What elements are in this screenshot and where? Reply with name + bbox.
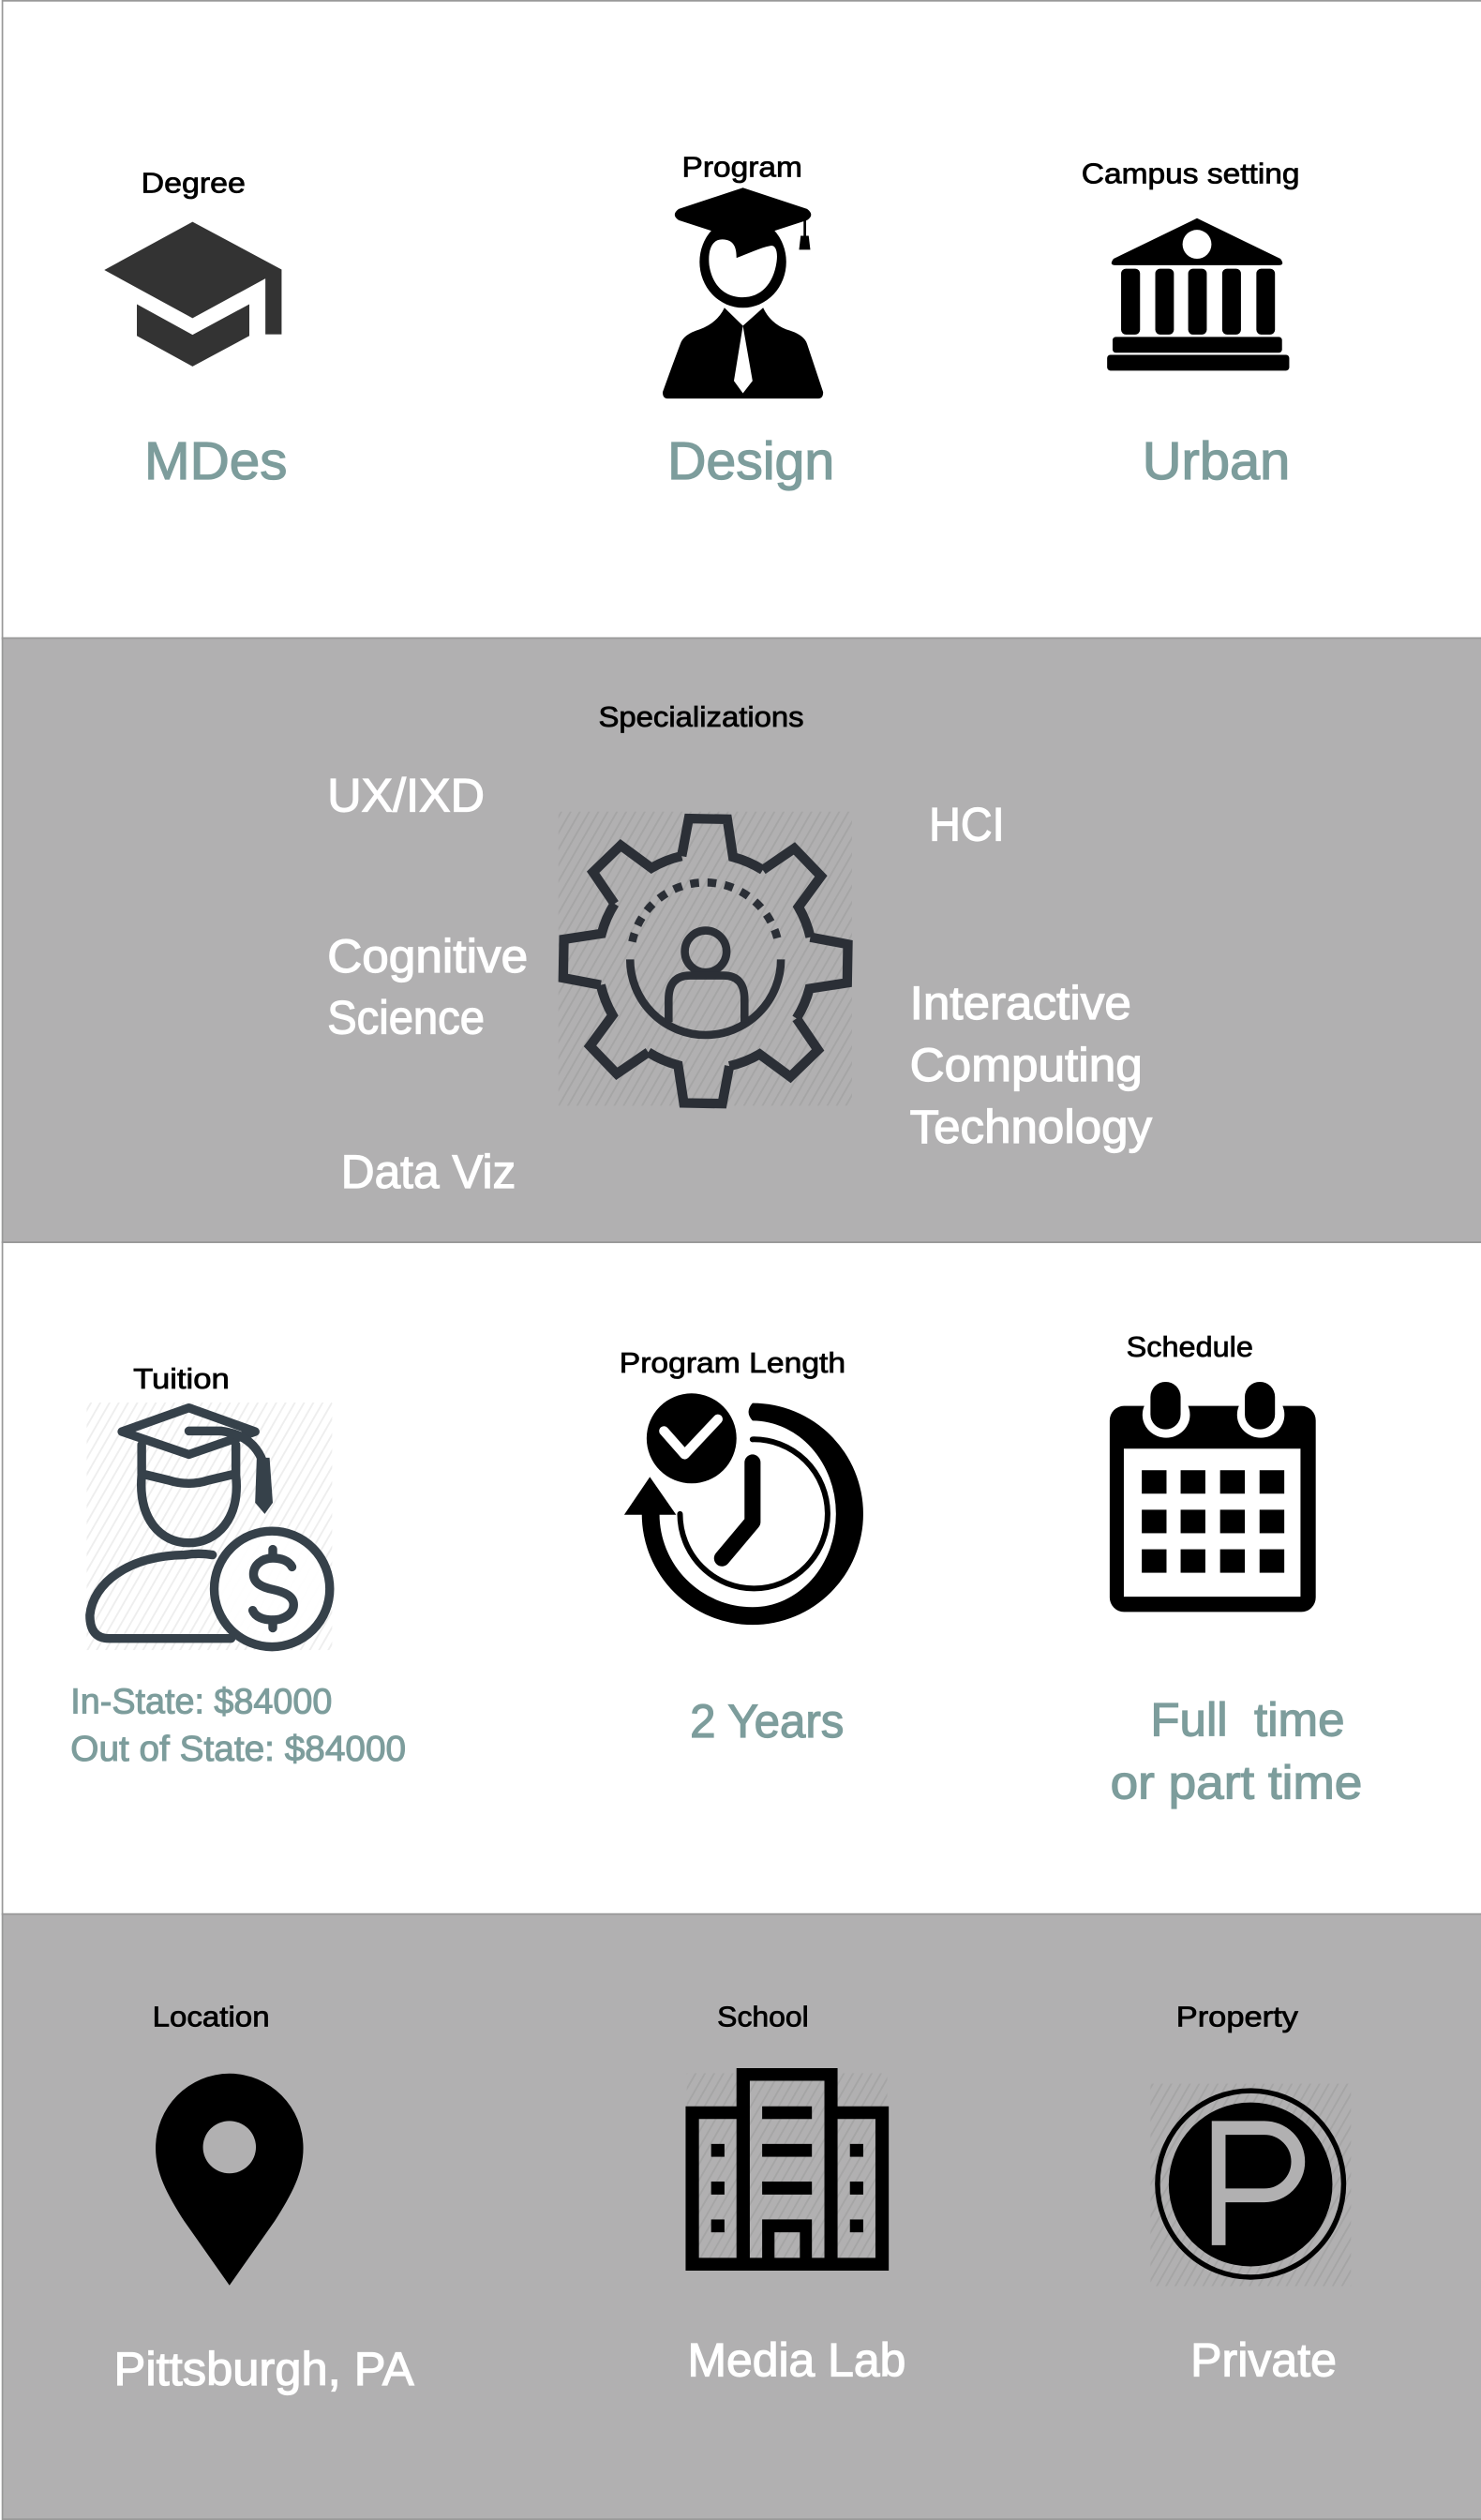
icon: calendar xyxy=(1110,1382,1316,1612)
specialization: HCI: HCI xyxy=(929,799,1005,851)
icon: mortarboard xyxy=(104,222,281,367)
panel: specializations xyxy=(3,638,1481,1242)
specialization: Interactive Computing Technology xyxy=(910,977,1152,1153)
specialization: Interactive Computing Technology: Technology xyxy=(910,1101,1152,1153)
value: tuition costs: In-State: $84000 xyxy=(70,1681,332,1720)
value: Design: Design xyxy=(667,431,834,490)
specialization: Cognitive Science: Cognitive xyxy=(327,930,528,982)
heading: Schedule: Schedule xyxy=(1127,1330,1253,1363)
value: schedule options: Full time xyxy=(1150,1693,1344,1746)
specialization: Interactive Computing Technology: Interactive xyxy=(910,977,1131,1029)
icon: graduate with dollar coin xyxy=(86,1402,332,1650)
icon: map pin xyxy=(156,2074,304,2286)
heading: Program Length: Program Length xyxy=(620,1346,845,1379)
icon: graduate xyxy=(663,188,823,398)
value: 2 Years: 2 Years xyxy=(690,1695,844,1748)
value: tuition costs: Out of State: $84000 xyxy=(70,1729,406,1768)
heading: Campus setting: Campus setting xyxy=(1082,157,1300,189)
value: Private: Private xyxy=(1190,2334,1337,2387)
icon: gear with person xyxy=(559,812,852,1105)
specialization: Cognitive Science xyxy=(327,930,528,1043)
value: MDes: MDes xyxy=(144,431,287,490)
heading: Specializations: Specializations xyxy=(599,700,804,733)
heading: Program: Program xyxy=(682,151,802,184)
value: schedule options xyxy=(1111,1693,1362,1808)
value: schedule options: or part time xyxy=(1111,1756,1362,1808)
value: tuition costs xyxy=(70,1681,406,1768)
heading: School: School xyxy=(717,2001,809,2033)
heading: Location: Location xyxy=(153,2001,270,2033)
panel: cost and duration xyxy=(3,1242,1481,1914)
icon: campus building xyxy=(1107,218,1289,370)
icon: property P badge xyxy=(1150,2084,1351,2287)
specialization: UX/IXD: UX/IXD xyxy=(327,770,485,822)
panel: program overview xyxy=(3,1,1481,638)
value: Media Lab: Media Lab xyxy=(688,2334,905,2387)
icon: school building xyxy=(685,2068,889,2271)
specialization: Cognitive Science: Science xyxy=(327,991,485,1043)
value: Urban: Urban xyxy=(1143,431,1290,490)
heading: Degree: Degree xyxy=(142,167,246,200)
specialization: Data Viz: Data Viz xyxy=(341,1146,516,1198)
specialization: Interactive Computing Technology: Computing xyxy=(910,1039,1143,1091)
value: Pittsburgh, PA: Pittsburgh, PA xyxy=(114,2343,415,2395)
heading: Tuition: Tuition xyxy=(133,1362,230,1395)
icon: clock with check xyxy=(624,1393,863,1625)
panel: institution xyxy=(3,1914,1481,2519)
heading: Property: Property xyxy=(1176,2001,1299,2033)
